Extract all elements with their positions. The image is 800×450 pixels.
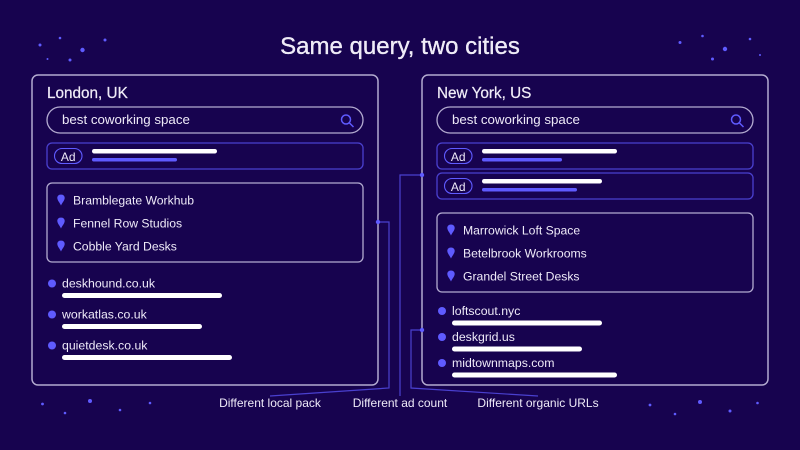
icon: search <box>342 115 354 127</box>
organic results: workatlas.co.uk <box>61 308 148 322</box>
organic results: deskgrid.us <box>452 330 515 344</box>
label: different ad count: Different ad count <box>353 396 448 410</box>
ad result 1 <box>437 143 753 169</box>
ad result 2 <box>437 173 753 199</box>
icon: pin <box>57 194 65 206</box>
heading: New York: New York, US <box>437 85 531 102</box>
heading: London: London, UK <box>47 85 129 102</box>
search bar: best coworking space <box>452 112 580 127</box>
local pack: Grandel Street Desks <box>463 270 580 284</box>
panel: London, UK <box>32 75 378 385</box>
leader: different local pack <box>270 220 389 396</box>
ad result: Ad <box>61 150 76 164</box>
icon: pin <box>57 218 65 228</box>
icon: search <box>732 115 744 127</box>
local pack: Betelbrook Workrooms <box>463 246 587 260</box>
ad result <box>47 143 363 169</box>
local pack: Bramblegate Workhub <box>73 194 194 208</box>
organic results <box>438 304 617 378</box>
decorative stars <box>38 35 761 415</box>
local pack: Fennel Row Studios <box>73 216 182 230</box>
label: different local pack: Different local pack <box>219 396 322 410</box>
ad result 2: Ad <box>451 180 466 194</box>
organic results: deskhound.co.uk <box>62 276 156 290</box>
local pack: Cobble Yard Desks <box>73 240 177 254</box>
search bar: best coworking space <box>62 112 190 127</box>
search bar <box>47 107 363 133</box>
leader: different ad count <box>400 173 424 396</box>
icon: pin <box>57 240 65 252</box>
search bar <box>437 107 753 133</box>
icon: pin <box>447 248 455 258</box>
icon: pin <box>447 270 455 282</box>
organic results: midtownmaps.com <box>452 356 555 370</box>
leader: different organic URLs <box>411 328 538 396</box>
icon: pin <box>447 224 455 236</box>
title: Same query, two cities <box>280 33 520 60</box>
label: different organic URLs: Different organic URLs <box>477 396 599 410</box>
organic results: loftscout.nyc <box>452 304 520 318</box>
organic results: quietdesk.co.uk <box>62 338 148 352</box>
local pack <box>47 183 363 262</box>
local pack: Marrowick Loft Space <box>463 224 580 238</box>
organic results <box>48 276 232 360</box>
ad result 1: Ad <box>451 150 466 164</box>
panel: New York, US <box>422 75 768 385</box>
local pack <box>437 213 753 292</box>
